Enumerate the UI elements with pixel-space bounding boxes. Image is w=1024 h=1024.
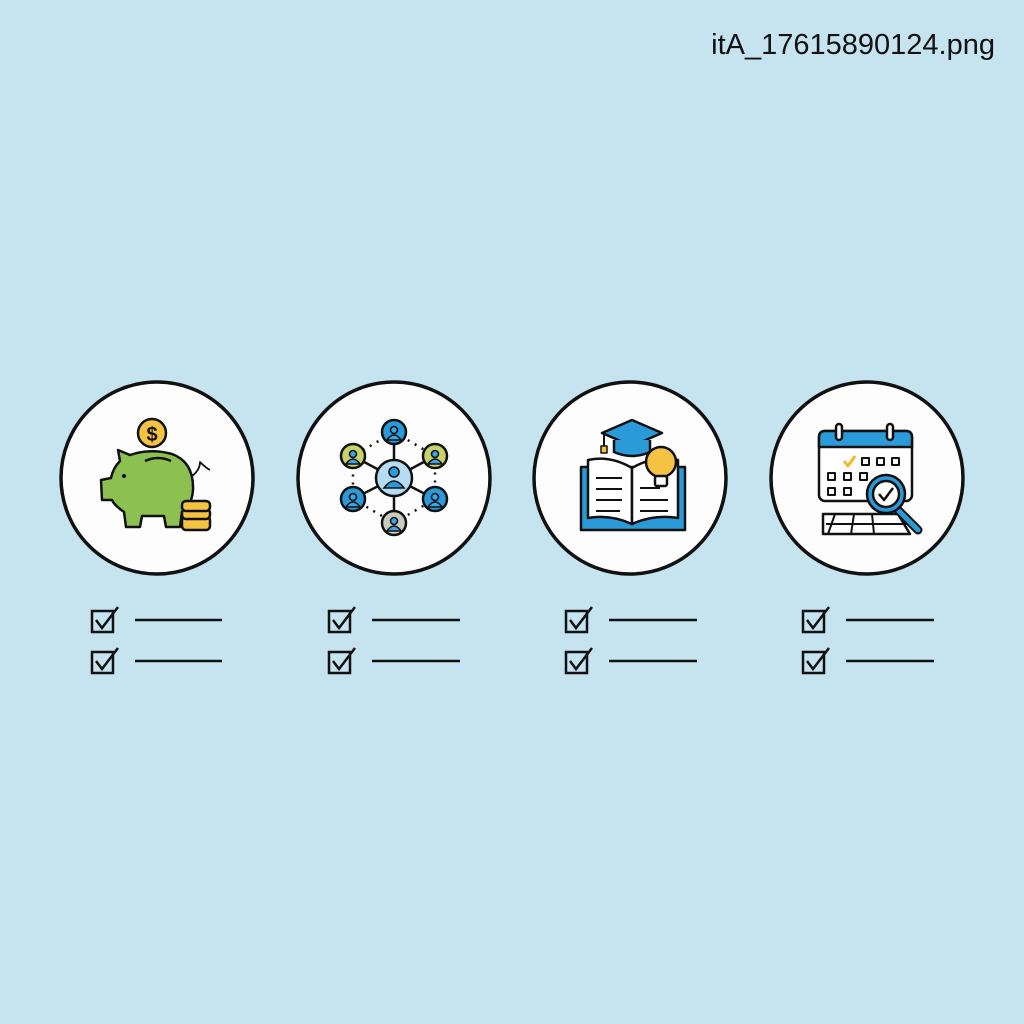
checklist: column 4 [803,607,934,673]
icon: piggy bank [101,419,210,530]
panel: education [534,382,726,574]
checklist: column 1 [92,607,222,673]
title: file name: itA_17615890124.png [711,29,995,61]
panel: calendar [771,382,963,574]
panel: savings [61,382,253,574]
icon: calendar with magnifier [819,424,918,534]
icon: piggy bank: $ [146,424,158,446]
checklist: column 3 [566,607,697,673]
icon: book, cap and bulb [581,420,685,530]
panel: network [298,382,490,574]
checklist: column 2 [329,607,460,673]
icon: people network [341,420,447,535]
